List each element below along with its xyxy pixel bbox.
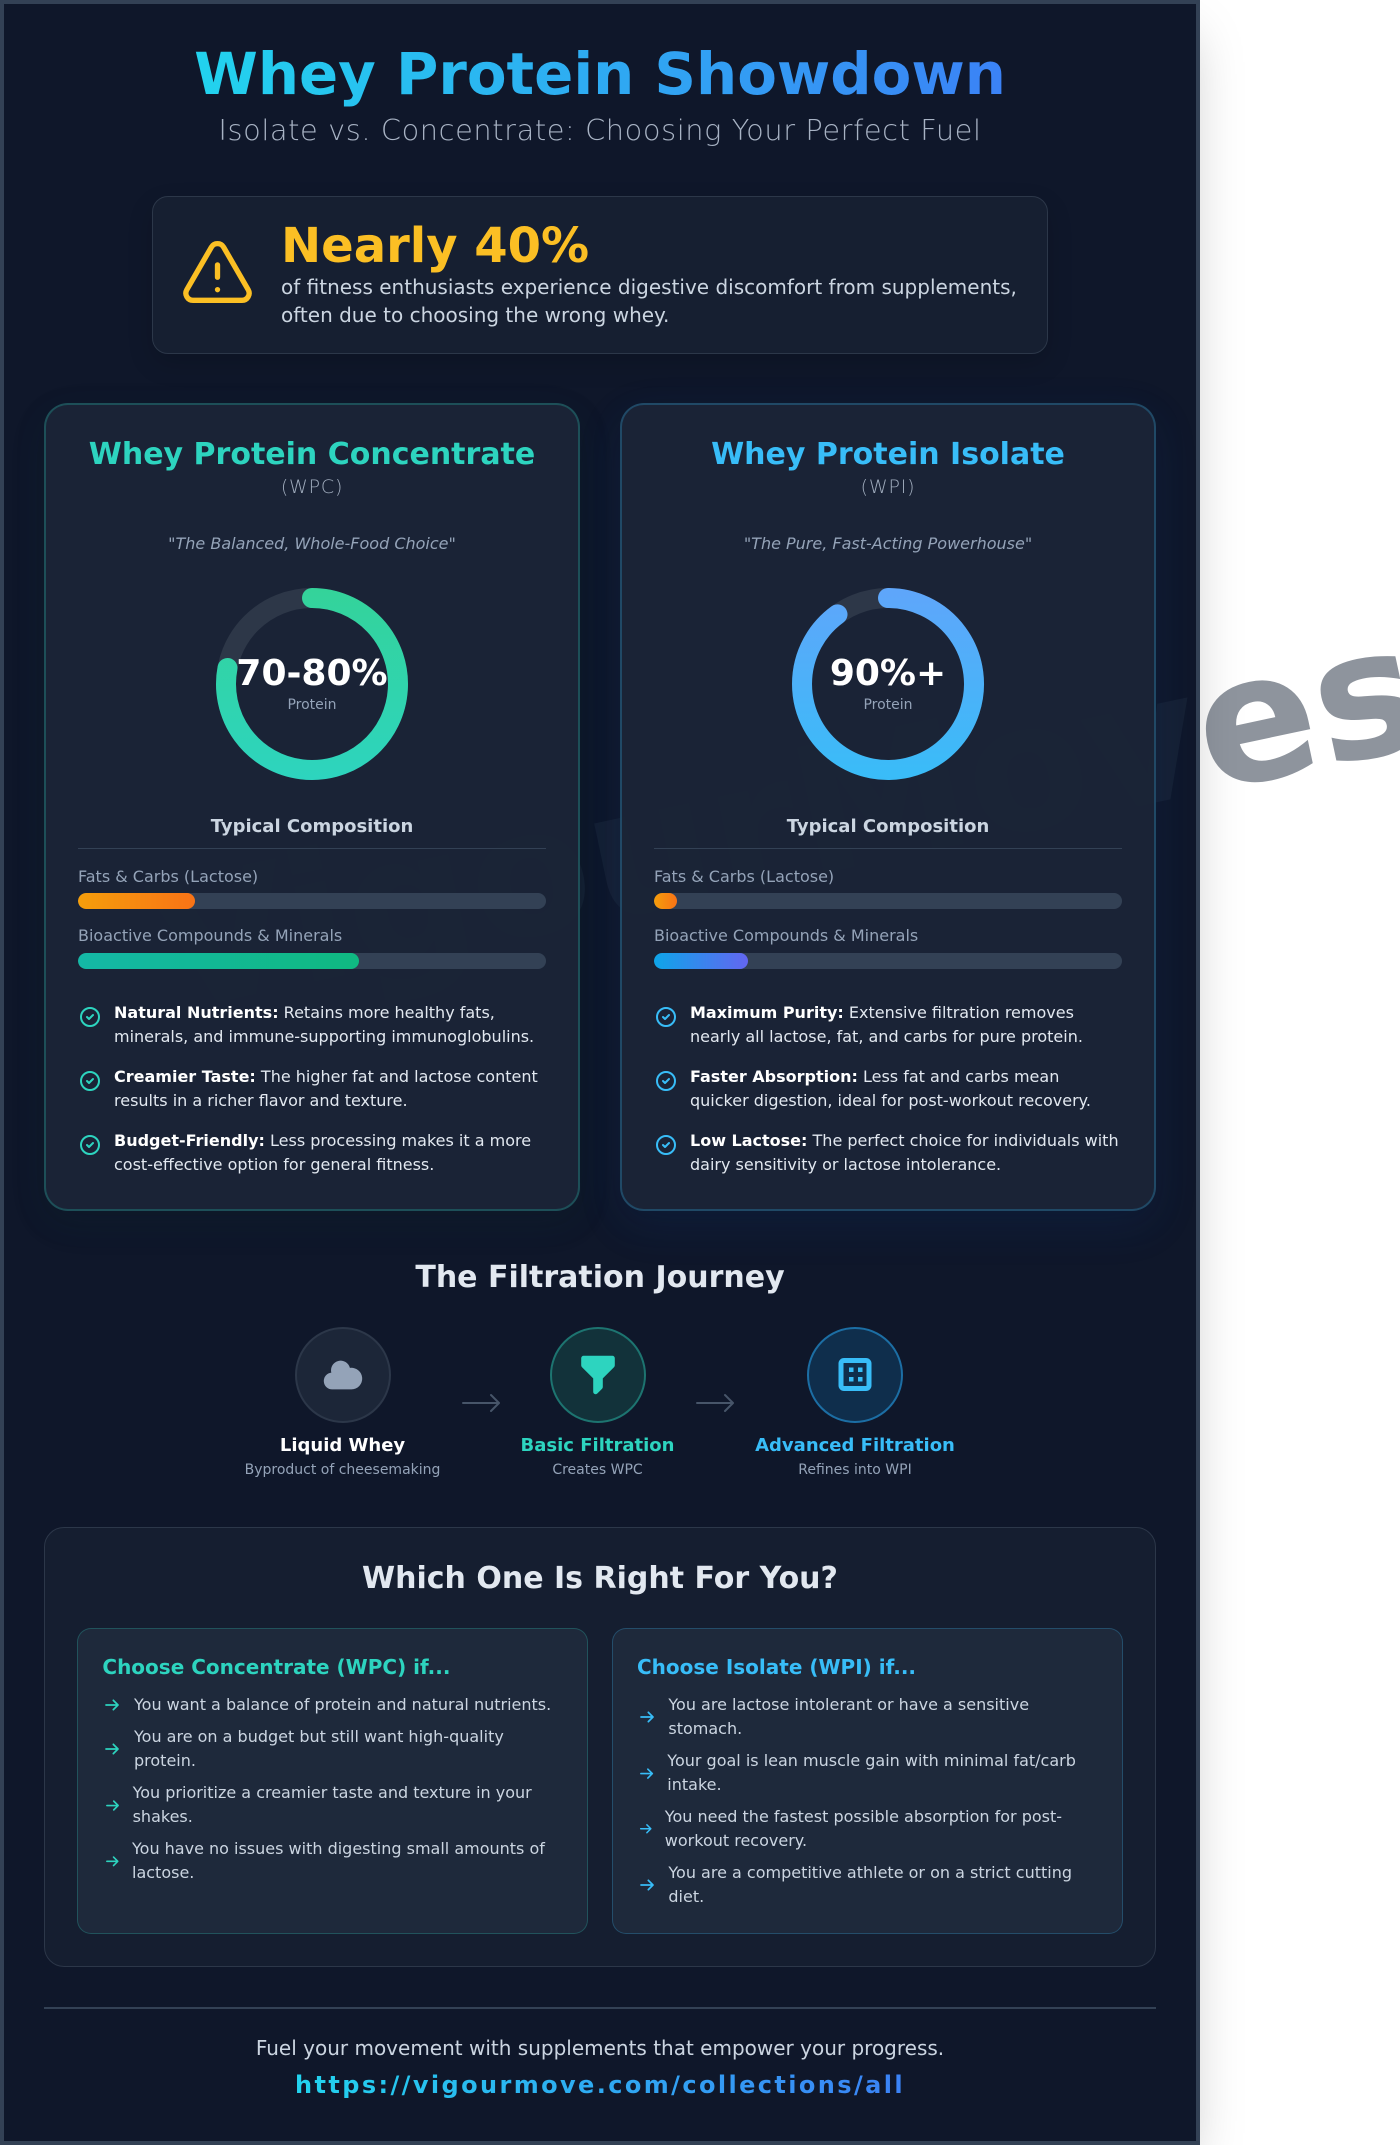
- benefit: natural nutrients: Natural Nutrients: Retains more healthy fats,: [114, 1003, 495, 1022]
- panel: choose concentrate: [77, 1628, 588, 1934]
- chart: protein ring 70-80%: [216, 588, 408, 780]
- abbreviation: (WPI): [861, 476, 915, 498]
- choice text: You are on a budget but still want high-quality: [134, 1727, 504, 1746]
- choice text: [668, 1695, 1029, 1738]
- heading: Choose Isolate (WPI) if...: [637, 1655, 916, 1679]
- statistic number: Nearly 40%: [281, 218, 589, 274]
- choice text: lactose.: [132, 1863, 194, 1882]
- composition heading: Typical Composition: [787, 816, 989, 837]
- step 3 note: Refines into WPI: [798, 1462, 912, 1478]
- statistic text: of fitness enthusiasts experience digestive discomfort from supplements,: [281, 275, 1017, 299]
- abbreviation: (WPC): [281, 476, 343, 498]
- heading: Whey Protein Isolate: [711, 437, 1065, 472]
- arrow icon: [106, 1856, 119, 1866]
- ring label: Protein: [287, 697, 337, 713]
- arrow: step 2 to 3: [696, 1394, 734, 1412]
- icon: funnel: [581, 1356, 615, 1394]
- choice text: workout recovery.: [665, 1831, 807, 1850]
- arrow icon: [106, 1800, 119, 1811]
- subtitle: Isolate vs. Concentrate: Choosing Your Perfect Fuel: [218, 112, 982, 146]
- bar: bioactive 60%: [78, 953, 546, 969]
- benefit: low lactose: [690, 1131, 1119, 1174]
- statistic text: [281, 275, 1017, 327]
- icon: cloud: [324, 1360, 362, 1390]
- arrow icon: [640, 1879, 654, 1891]
- step 2 note: Creates WPC: [552, 1462, 643, 1478]
- choice text: [132, 1783, 532, 1826]
- icon: check: [80, 1007, 100, 1027]
- ring value: 90%+: [830, 653, 946, 694]
- ring value: 70-80%: [236, 653, 388, 694]
- step 3 circle: advanced filtration: [807, 1327, 903, 1423]
- choice text: You are a competitive athlete or on a strict cutting: [668, 1863, 1072, 1882]
- title: Whey Protein Showdown: [194, 40, 1006, 108]
- bar label: bioactive: Bioactive Compounds & Minerals: [78, 926, 342, 945]
- arrow icon: [105, 1699, 119, 1711]
- statistic text: often due to choosing the wrong whey.: [281, 303, 669, 327]
- arrow icon: [640, 1824, 652, 1834]
- choice text: You have no issues with digesting small amounts of: [132, 1839, 545, 1858]
- icon: grid filter: [838, 1358, 872, 1391]
- watermark: VigourMoves: [136, 585, 1400, 1053]
- choice text: intake.: [667, 1775, 722, 1794]
- icon: check: [80, 1135, 100, 1155]
- heading: Whey Protein Concentrate: [89, 437, 535, 472]
- step 2 label: Basic Filtration: [521, 1435, 674, 1456]
- tagline: "The Balanced, Whole-Food Choice": [168, 534, 456, 553]
- bar label: fats: Fats & Carbs (Lactose): [654, 867, 834, 886]
- bar: bioactive 20%: [654, 953, 1122, 969]
- benefit: creamier taste: [114, 1067, 538, 1110]
- bar: fats 5%: [654, 893, 1122, 909]
- benefit: low lactose: Low Lactose: The perfect choice for individuals with: [690, 1131, 1119, 1150]
- choice text: [668, 1863, 1072, 1906]
- choice text: Your goal is lean muscle gain with minimal fat/carb: [667, 1751, 1076, 1770]
- composition heading: Typical Composition: [211, 816, 413, 837]
- bar: fats 25%: [78, 893, 546, 909]
- benefit: budget-friendly: Budget-Friendly: Less processing makes it a more: [114, 1131, 531, 1150]
- bar label: bioactive: Bioactive Compounds & Minerals: [654, 926, 918, 945]
- icon: check: [656, 1135, 676, 1155]
- heading: filtration journey: The Filtration Journey: [415, 1260, 785, 1295]
- heading: Which One Is Right For You?: [362, 1561, 838, 1596]
- choice text: shakes.: [133, 1807, 193, 1826]
- choice text: You want a balance of protein and natural nutrients.: [134, 1695, 551, 1714]
- benefit: faster absorption: Faster Absorption: Less fat and carbs mean: [690, 1067, 1059, 1086]
- benefit: budget-friendly: cost-effective option for general fitness.: [114, 1155, 434, 1174]
- callout: statistic: [152, 196, 1048, 354]
- panel: choose isolate: [612, 1628, 1123, 1934]
- arrow: step 1 to 2: [462, 1394, 500, 1412]
- choice text: [132, 1839, 546, 1882]
- chart: protein ring 90%+: [792, 588, 984, 780]
- benefit: natural nutrients: [114, 1003, 534, 1046]
- panel: whey protein isolate: [620, 403, 1156, 1211]
- benefit: faster absorption: quicker digestion, ideal for post-workout recovery.: [690, 1091, 1091, 1110]
- arrow icon: [640, 1768, 654, 1779]
- icon: warning triangle: [183, 241, 252, 303]
- step 1 circle: liquid whey: [294, 1327, 390, 1423]
- icon: check: [656, 1007, 676, 1027]
- footer link: https://vigourmove.com/collections/all: [295, 2070, 905, 2098]
- choice text: [134, 1727, 504, 1770]
- benefit: maximum purity: nearly all lactose, fat, and carbs for pure protein.: [690, 1027, 1083, 1046]
- choice text: You are lactose intolerant or have a sensitive: [668, 1695, 1029, 1714]
- benefit: creamier taste: results in a richer flavor and texture.: [114, 1091, 408, 1110]
- arrow icon: [640, 1711, 654, 1723]
- icon: check: [656, 1071, 676, 1091]
- step 1 note: Byproduct of cheesemaking: [245, 1462, 440, 1478]
- panel: whey protein concentrate: [44, 403, 580, 1211]
- choice text: [664, 1807, 1062, 1850]
- step 1 label: Liquid Whey: [280, 1435, 405, 1456]
- icon: check: [80, 1071, 100, 1091]
- tagline: "The Pure, Fast-Acting Powerhouse": [744, 534, 1032, 553]
- benefit: budget-friendly: [114, 1131, 531, 1174]
- step 2 circle: basic filtration: [550, 1327, 646, 1423]
- step 3 label: Advanced Filtration: [755, 1435, 955, 1456]
- benefit: creamier taste: Creamier Taste: The higher fat and lactose content: [114, 1067, 538, 1086]
- footer tagline: Fuel your movement with supplements that empower your progress.: [256, 2036, 944, 2060]
- bar label: fats: Fats & Carbs (Lactose): [78, 867, 258, 886]
- panel: which one is right for you: [44, 1527, 1156, 1967]
- benefit: natural nutrients: minerals, and immune-supporting immunoglobulins.: [114, 1027, 534, 1046]
- choice text: diet.: [668, 1887, 704, 1906]
- choice text: protein.: [134, 1751, 196, 1770]
- choice text: You prioritize a creamier taste and texture in your: [133, 1783, 532, 1802]
- benefit: maximum purity: Maximum Purity: Extensive filtration removes: [690, 1003, 1074, 1022]
- heading: Choose Concentrate (WPC) if...: [102, 1655, 450, 1679]
- benefit: low lactose: dairy sensitivity or lactose intolerance.: [690, 1155, 1001, 1174]
- choice text: You need the fastest possible absorption for post-: [665, 1807, 1062, 1826]
- ring label: Protein: [863, 697, 913, 713]
- arrow icon: [105, 1743, 119, 1755]
- benefit: faster absorption: [690, 1067, 1091, 1110]
- benefit: maximum purity: [690, 1003, 1083, 1046]
- choice text: stomach.: [668, 1719, 742, 1738]
- choice text: [667, 1751, 1076, 1794]
